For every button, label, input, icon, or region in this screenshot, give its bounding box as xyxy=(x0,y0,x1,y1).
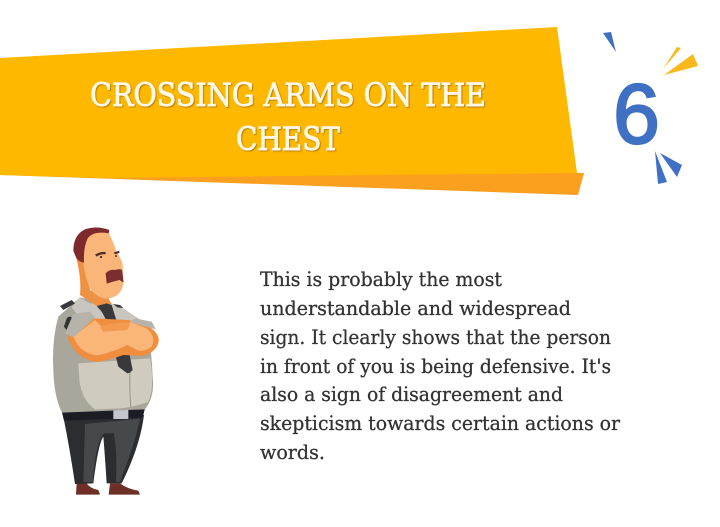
number 6: 6 xyxy=(613,67,660,161)
crossed arms xyxy=(68,318,159,362)
ear and hair xyxy=(73,227,109,263)
tie xyxy=(97,303,133,373)
epaulette xyxy=(60,300,75,310)
illustration: man with crossed arms xyxy=(53,227,159,495)
body text: sign. It clearly shows that the person xyxy=(260,325,611,349)
shoulder badge xyxy=(64,317,75,333)
epaulette right xyxy=(113,304,123,308)
body text: in front of you is being defensive. It's xyxy=(260,354,611,378)
belt xyxy=(62,408,145,421)
shirt torso xyxy=(53,297,153,413)
body text: also a sign of disagreement and xyxy=(260,382,563,406)
title xyxy=(90,76,486,158)
sleeves xyxy=(65,312,156,337)
eyes and brows xyxy=(95,251,119,258)
title: CROSSING ARMS ON THE xyxy=(90,76,486,114)
icon: burst sparks xyxy=(603,32,698,184)
neck xyxy=(75,255,112,306)
body text: understandable and widespread xyxy=(260,296,571,320)
body text xyxy=(260,267,620,464)
title: CHEST xyxy=(236,120,341,158)
trousers xyxy=(63,415,144,484)
body text: words. xyxy=(260,440,325,464)
shoes xyxy=(76,483,140,495)
banner xyxy=(0,27,584,195)
belt buckle xyxy=(113,410,128,419)
head xyxy=(83,231,123,299)
moustache xyxy=(106,269,124,284)
body text: This is probably the most xyxy=(260,267,502,291)
body text: skepticism towards certain actions or xyxy=(260,411,620,435)
